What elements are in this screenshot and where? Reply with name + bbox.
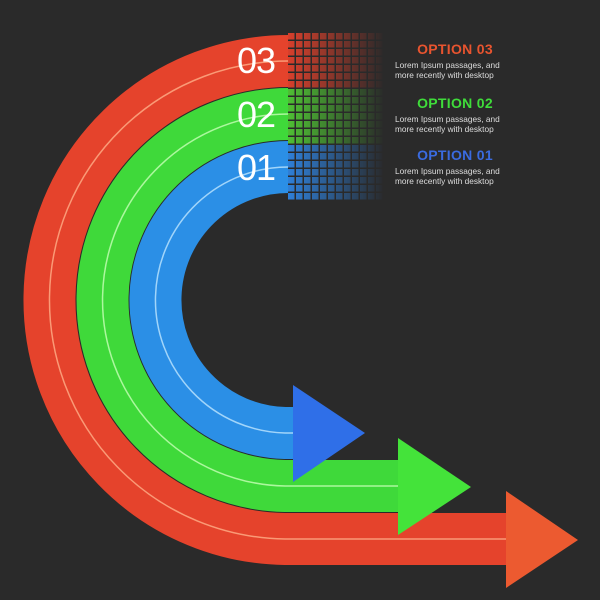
band: blue: [155, 167, 365, 482]
text: option 01: OPTION 01: [417, 147, 493, 163]
text: option 03: OPTION 03: [417, 41, 493, 57]
number 03: 03: [237, 40, 275, 81]
band: red: [49, 61, 578, 588]
text: option 03: [395, 41, 500, 80]
number 01: 01: [237, 147, 275, 188]
text: option 02: [395, 95, 500, 134]
number 02: 02: [237, 94, 275, 135]
text: option 03: Lorem Ipsum passages, and more recently with desktop: [395, 60, 500, 80]
text: option 02: Lorem Ipsum passages, and more recently with desktop: [395, 114, 500, 134]
text: option 01: [395, 147, 500, 186]
text: option 01: Lorem Ipsum passages, and more recently with desktop: [395, 166, 500, 186]
band: green: [103, 114, 471, 535]
text: option 02: OPTION 02: [417, 95, 493, 111]
mosaic: colored pixel grids: [288, 33, 380, 200]
